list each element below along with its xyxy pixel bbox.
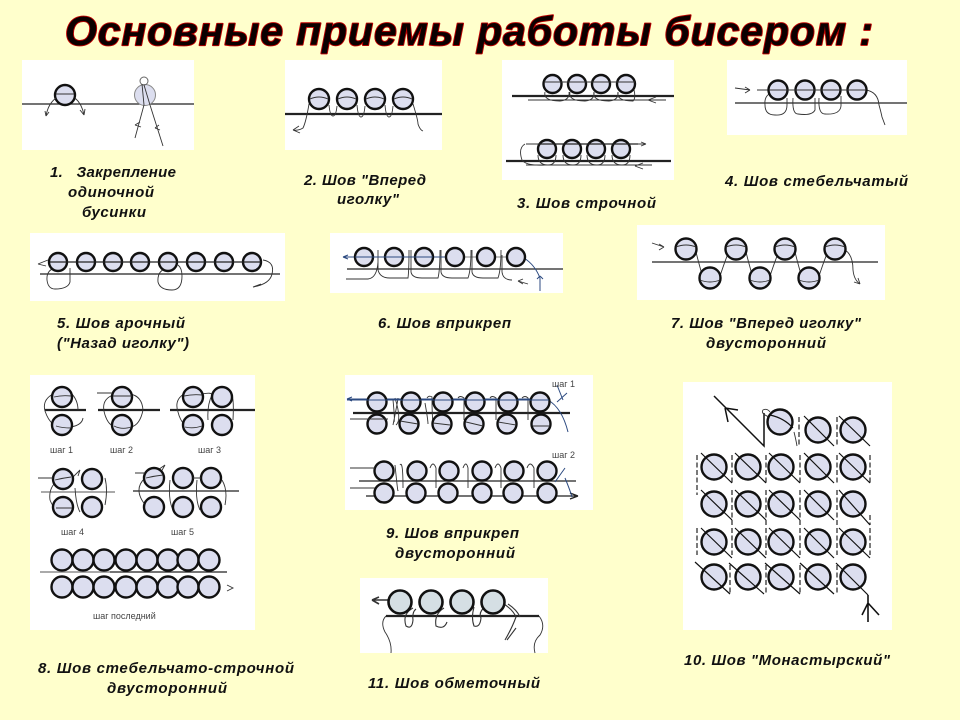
- caption 1: 1. Закрепление: [50, 164, 176, 181]
- panel 8: stem-backstitch double-sided: шаг 1: [50, 445, 73, 455]
- panel 10: monastery stitch: [683, 382, 892, 630]
- caption 9: 9. Шов вприкреп: [386, 525, 519, 542]
- caption 2: иголку": [337, 191, 400, 208]
- caption 7: 7. Шов "Вперед иголку": [671, 315, 862, 332]
- panel 8: stem-backstitch double-sided: шаг 4: [61, 527, 84, 537]
- panel 6: couching stitch: [330, 233, 563, 293]
- caption 8: 8. Шов стебельчато-строчной: [38, 660, 294, 677]
- caption 7: [671, 315, 862, 352]
- caption 7: двусторонний: [706, 335, 826, 352]
- caption 9: [386, 525, 519, 562]
- panel 11: overcast stitch: [360, 578, 548, 653]
- panel 9: double-sided couching: шаг 1: [552, 379, 575, 389]
- panel 8: stem-backstitch double-sided: шаг последний: [93, 611, 156, 621]
- caption 1: одиночной: [68, 184, 154, 201]
- panel 1: single bead: [22, 60, 194, 150]
- panel 2: forward needle stitch: [285, 60, 442, 150]
- caption 8: двусторонний: [107, 680, 227, 697]
- panel 5: arch stitch: [30, 233, 285, 301]
- caption 1: бусинки: [82, 204, 146, 221]
- panel 8: stem-backstitch double-sided: шаг 2: [110, 445, 133, 455]
- caption 4: 4. Шов стебельчатый: [724, 173, 908, 190]
- panel 9: double-sided couching: шаг 2: [552, 450, 575, 460]
- caption 2: [303, 172, 426, 208]
- panel 3: backstitch: [502, 60, 674, 180]
- panel 7: double-sided forward stitch: [637, 225, 885, 300]
- caption 9: двусторонний: [395, 545, 515, 562]
- caption 6: 6. Шов вприкреп: [378, 315, 511, 332]
- title: Основные приемы работы бисером :: [65, 8, 873, 54]
- panel 8: stem-backstitch double-sided: шаг 3: [198, 445, 221, 455]
- caption 5: 5. Шов арочный: [57, 315, 185, 332]
- caption 5: [57, 315, 189, 352]
- caption 8: [38, 660, 294, 697]
- caption 1: [50, 164, 176, 221]
- caption 11: 11. Шов обметочный: [368, 675, 540, 692]
- caption 2: 2. Шов "Вперед: [303, 172, 426, 189]
- panel 4: stem stitch: [727, 60, 907, 135]
- caption 3: 3. Шов строчной: [517, 195, 656, 212]
- caption 10: 10. Шов "Монастырский": [684, 652, 891, 669]
- caption 5: ("Назад иголку"): [57, 335, 189, 352]
- panel 9: double-sided couching: [345, 375, 593, 510]
- panel 8: stem-backstitch double-sided: шаг 5: [171, 527, 194, 537]
- panel 8: stem-backstitch double-sided: [30, 375, 255, 630]
